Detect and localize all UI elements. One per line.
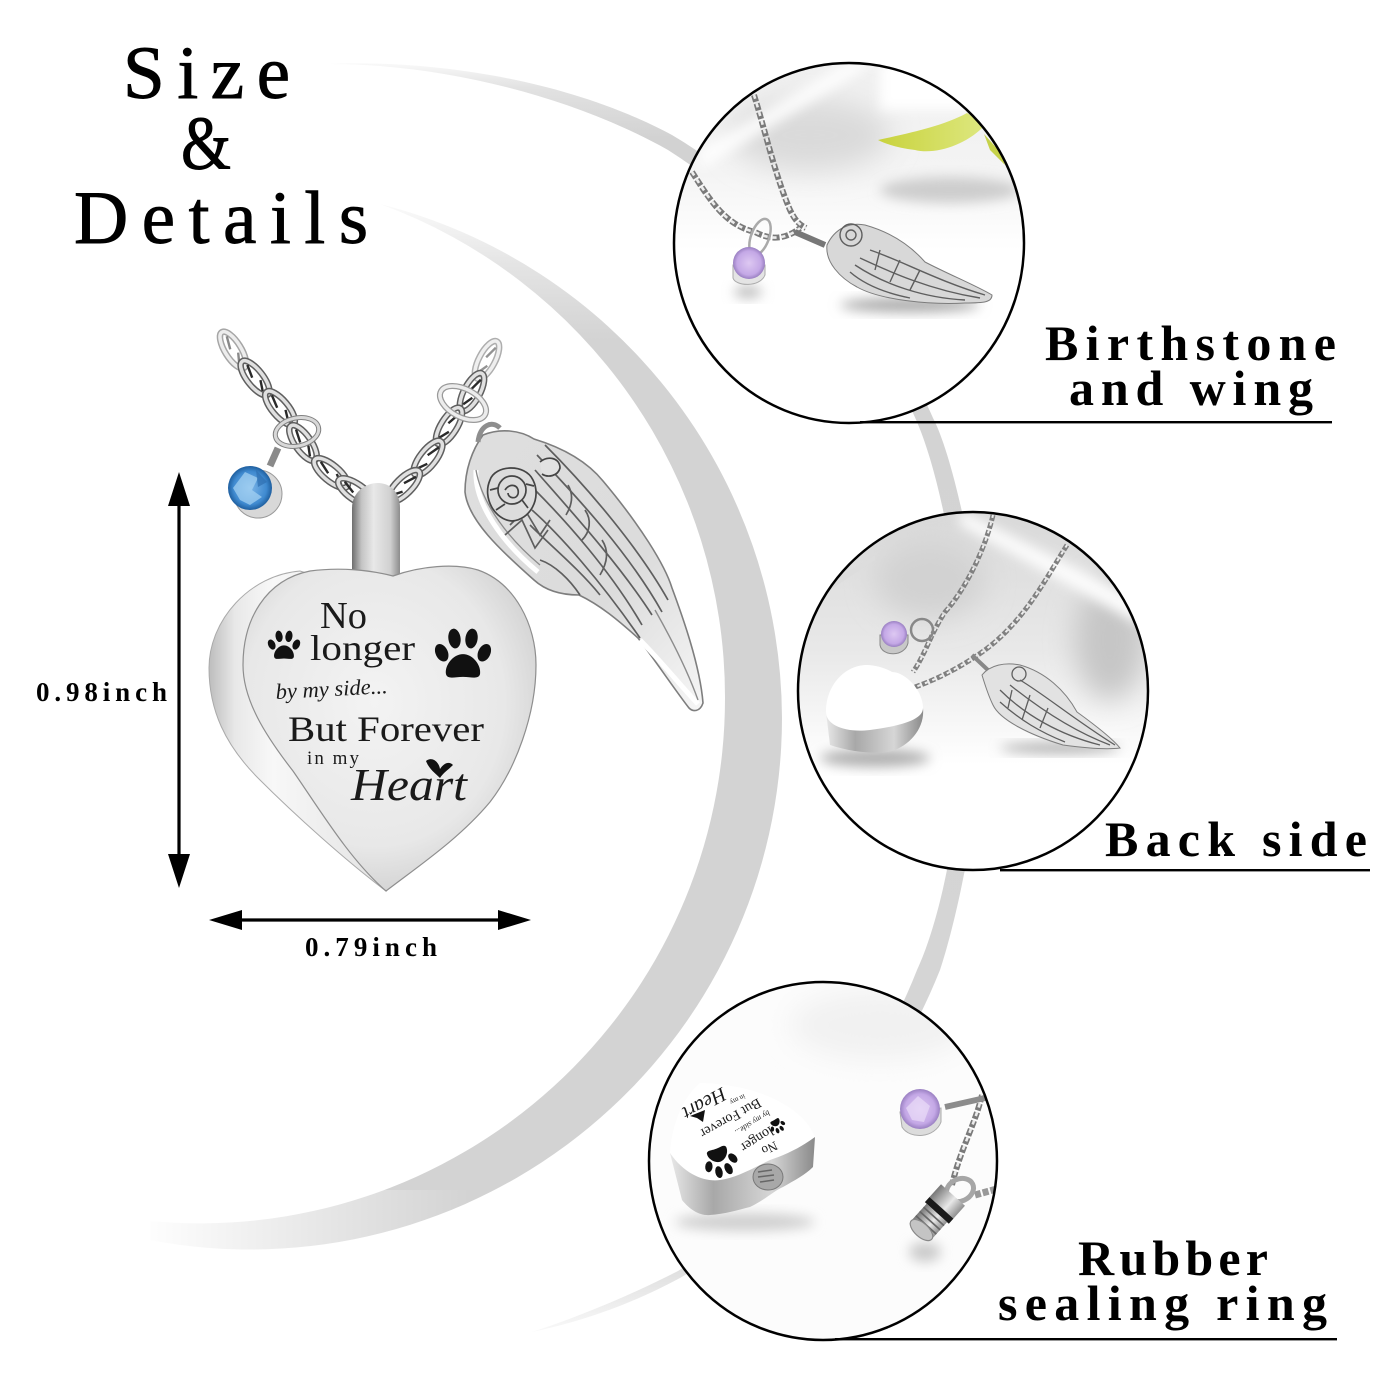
title: & [181, 102, 231, 186]
icon: wing [982, 664, 1120, 749]
label: birthstone and wing: and wing [1069, 360, 1313, 416]
panel: back side [790, 505, 1160, 870]
label: rubber sealing ring: Rubber [1078, 1230, 1268, 1286]
height label: 0.98inch [36, 677, 167, 707]
panel: rubber sealing ring [649, 980, 1000, 1340]
heart face with engraving: Heart [350, 759, 468, 810]
icon: engraved heart [690, 1110, 705, 1122]
chain [215, 328, 504, 511]
icon: large paw [432, 628, 494, 678]
heart top face with engraving: Heart [678, 1082, 731, 1124]
chains [692, 95, 825, 258]
bail [352, 483, 400, 576]
heart face with engraving [243, 566, 536, 891]
icon: small paw [770, 1118, 786, 1134]
chains [911, 515, 1067, 687]
heart top face with engraving: in my [728, 1092, 747, 1106]
title [74, 32, 368, 260]
heart face with engraving: longer [310, 628, 415, 668]
title: Details [74, 177, 368, 260]
heart top face with engraving: by my side... [733, 1108, 772, 1137]
main pendant necklace [209, 328, 703, 891]
heart face with engraving: by my side... [275, 673, 388, 704]
label: rubber sealing ring: sealing ring [998, 1275, 1327, 1331]
icon: blue birthstone [228, 466, 282, 518]
icon: lilac gem [733, 247, 765, 284]
decorative wide inner arc [150, 204, 782, 1249]
chain [945, 1095, 1000, 1195]
height arrow [36, 472, 190, 888]
label: rubber sealing ring [835, 1230, 1337, 1340]
heart back [826, 665, 923, 753]
metal heart body [670, 1137, 815, 1215]
icon: wing [827, 224, 992, 303]
icon: lilac gem [900, 1089, 941, 1136]
panel: birthstone and wing [670, 60, 1030, 423]
heart face with engraving: But Forever [288, 709, 484, 749]
label: back side: Back side [1105, 811, 1367, 867]
icon: threaded screw with rubber ring [910, 1176, 976, 1242]
rose [488, 458, 560, 521]
heart face with engraving: in my [307, 748, 360, 769]
width label: 0.79inch [305, 932, 437, 962]
heart face with engraving: No [320, 595, 367, 637]
icon: engraved heart [426, 759, 453, 778]
leaf [878, 113, 982, 151]
angel wing charm [465, 424, 703, 711]
heart top face with engraving: longer [737, 1123, 776, 1154]
heart top face with engraving [670, 1082, 815, 1183]
icon: lilac gem [880, 621, 908, 654]
decorative thin outer arc [330, 63, 985, 1332]
title: Size [123, 32, 290, 115]
label: birthstone and wing [860, 315, 1336, 423]
hole [753, 1164, 783, 1190]
icon: paw [705, 1146, 738, 1178]
heart top face with engraving: But Forever [697, 1095, 763, 1140]
width arrow [209, 910, 531, 962]
heart top face with engraving: No [759, 1138, 780, 1159]
heart side [209, 571, 393, 891]
label: birthstone and wing: Birthstone [1045, 315, 1336, 371]
icon: small paw [266, 630, 302, 659]
gem and wing jump rings [270, 379, 492, 466]
